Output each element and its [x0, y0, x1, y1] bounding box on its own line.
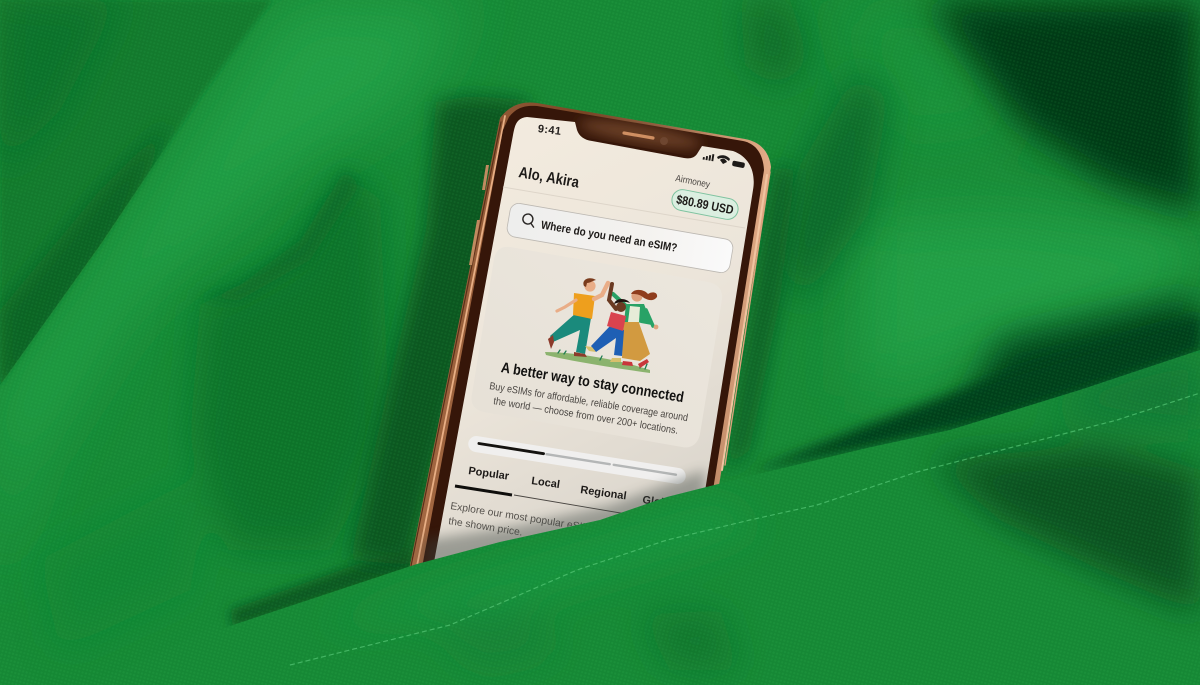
tab description: Explore our most popular eSIMs at	[450, 501, 608, 537]
carousel progress pill	[467, 435, 687, 485]
category tabs: Local	[531, 475, 561, 491]
card heading: A better way to stay connected	[500, 360, 685, 406]
phone frame	[403, 103, 771, 600]
airmoney balance pill: $80.89 USD	[675, 192, 735, 217]
search bar: Where do you need an eSIM?	[540, 219, 678, 255]
woman: jacket	[624, 304, 652, 325]
child: legs	[591, 326, 624, 356]
status icons	[703, 154, 745, 168]
category tabs: Global	[642, 494, 677, 511]
man: head	[584, 280, 596, 292]
search bar	[506, 202, 734, 274]
shadow at the pocket edge on the screen	[420, 470, 705, 590]
child: head	[616, 302, 626, 312]
man: torso	[573, 293, 595, 319]
screen	[427, 117, 754, 600]
card description: Buy eSIMs for affordable, reliable coverage around	[489, 381, 689, 424]
phone bezel	[416, 106, 764, 600]
bezel reflection	[577, 114, 703, 154]
divider under header	[503, 187, 745, 228]
pocket: front fabric layer	[230, 350, 1200, 674]
frame highlights	[411, 116, 770, 566]
shoes	[622, 359, 649, 368]
status bar: 9:41	[537, 123, 562, 138]
man: arms	[594, 283, 608, 299]
category tabs: Popular	[468, 465, 511, 483]
phone	[403, 103, 771, 600]
promo card	[472, 247, 722, 447]
child: arm	[609, 284, 616, 309]
woman: skirt	[622, 320, 650, 361]
card description: the world — choose from over 200+ locations.	[493, 396, 679, 437]
phone shadow on fabric	[350, 96, 795, 565]
child: torso	[607, 312, 626, 331]
woman: head and hair	[631, 290, 643, 302]
status bar	[537, 123, 745, 168]
notch speaker and camera	[624, 133, 668, 145]
man: legs	[550, 313, 591, 354]
greeting: Alo, Akira	[517, 164, 581, 192]
side buttons	[469, 165, 489, 265]
dark top-left wedge	[0, 0, 272, 385]
sharp fold shadows	[200, 170, 1200, 628]
pocket stitching	[290, 393, 1200, 665]
ground	[545, 352, 650, 373]
illustration: friends high-fiving	[545, 278, 658, 373]
tab underline	[455, 486, 650, 518]
category tabs	[468, 465, 677, 511]
category tabs: Regional	[580, 484, 627, 502]
airmoney label: Airmoney	[674, 173, 711, 191]
icon: search	[522, 213, 536, 227]
tab description: the shown price.	[448, 516, 523, 539]
